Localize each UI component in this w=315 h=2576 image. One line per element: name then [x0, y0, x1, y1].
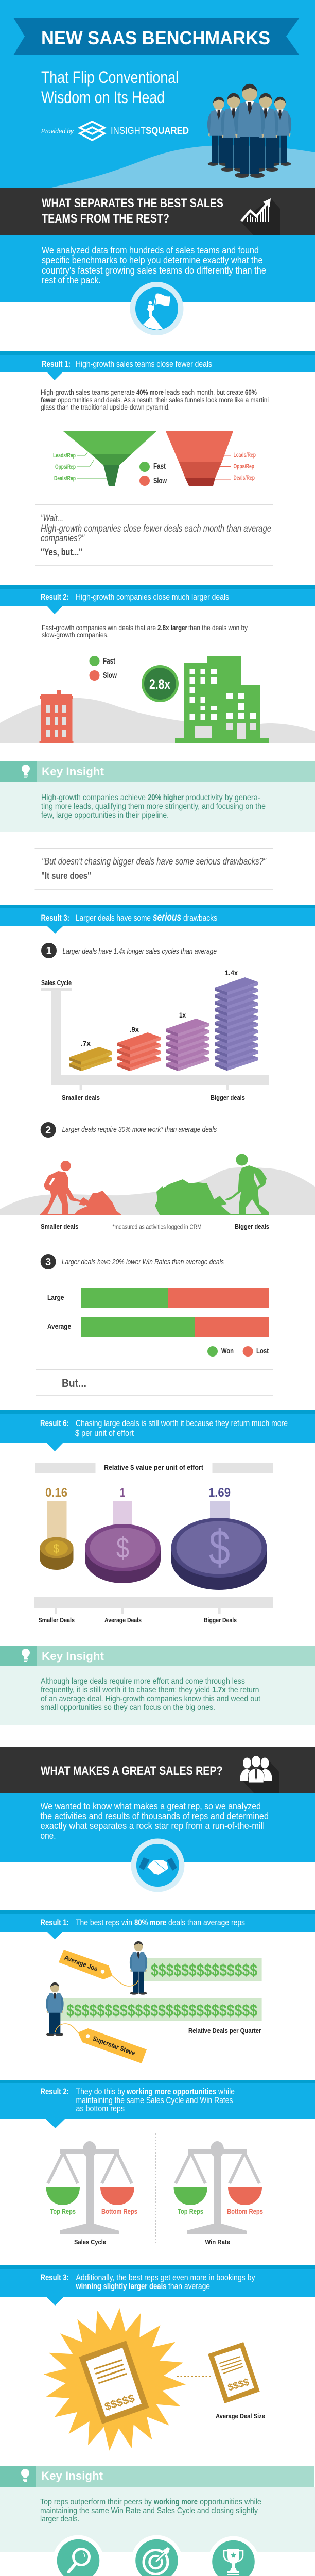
icon: magnifying glass — [52, 2535, 104, 2576]
drawback 2 heading: 2 — [45, 1125, 51, 1136]
paragraph: result 1: fewer — [41, 396, 57, 404]
deals bar: superstar steve — [60, 1998, 262, 2021]
scale: win rate: Win Rate — [205, 2238, 230, 2246]
key insight text: frequently, it is still worth it to chase them: they yield — [41, 1686, 210, 1694]
key insight text: the return — [228, 1686, 259, 1694]
key insight text: few, large opportunities in their pipeline. — [41, 811, 169, 820]
key insight text: opportunities while — [200, 2498, 261, 2506]
chart caption: Relative Deals per Quarter — [188, 2027, 261, 2035]
icon: light bulb — [21, 2469, 29, 2482]
provided by logo: Provided by — [41, 127, 74, 135]
balance scale comparison — [46, 2133, 263, 2246]
key insight text: small opportunities so they can focus on the big ones. — [41, 1703, 215, 1712]
building comparison — [0, 656, 315, 743]
legend: fast and slow — [139, 462, 167, 486]
small red building — [39, 690, 73, 743]
group of salesmen — [207, 84, 291, 178]
key insight text: productivity by genera- — [185, 793, 260, 802]
funnel chart: slow: Opps/Rep — [234, 463, 254, 470]
funnel chart: slow — [166, 431, 256, 486]
scale: win rate: Top Reps — [178, 2208, 203, 2215]
drawback 2 heading — [41, 1122, 217, 1138]
chart axis and labels: Smaller Deals — [38, 1616, 75, 1624]
drawback 3 heading — [41, 1254, 224, 1269]
worker labels: Smaller deals — [41, 1223, 78, 1230]
rep result 2 banner: maintaining the same Sales Cycle and Win Rates — [76, 2096, 233, 2105]
funnel chart: slow: Leads/Rep — [234, 451, 256, 459]
result 2 banner — [0, 585, 315, 614]
key insight heading: Key Insight — [41, 2469, 103, 2482]
chart header: Relative $ value per unit of effort — [104, 1463, 203, 1471]
chart axis and labels: Bigger Deals — [204, 1616, 237, 1624]
subtitle: That Flip Conventional — [41, 68, 179, 87]
stack: 1.4x: 1.4x — [225, 969, 238, 977]
stack: 1.4x — [215, 969, 258, 1071]
key insight heading: Key Insight — [42, 1650, 104, 1663]
result 2 banner: Result 2: — [41, 592, 69, 602]
badge: 2.8x: 2.8x — [149, 676, 170, 692]
figure: average joe — [130, 1941, 147, 1995]
key insight text: ting more leads, qualifying them more stringently, and focusing on the — [41, 802, 266, 811]
stack: .7x — [69, 1039, 112, 1071]
quote block 2: "But doesn't chasing bigger deals have some serious drawbacks?" — [42, 856, 267, 867]
subtitle — [41, 68, 179, 107]
section heading: what separates: TEAMS FROM THE REST? — [42, 212, 169, 226]
starburst with large contract: $$$$$ — [103, 2392, 136, 2413]
scale: sales cycle: Top Reps — [50, 2208, 76, 2215]
quote block 1 — [35, 504, 273, 566]
intro text: specific benchmarks to help you determine exactly what the — [42, 255, 262, 265]
icon: flag on mountain — [130, 282, 183, 335]
coin: bigger deals: 1.69 — [208, 1486, 231, 1500]
sales cycle chart: Smaller deals — [62, 1094, 100, 1101]
section heading: great sales rep — [0, 1747, 315, 1793]
large green building — [175, 656, 269, 743]
tag: superstar steve: Superstar Steve — [92, 2035, 136, 2057]
legend: won and lost — [207, 1346, 269, 1357]
stack: .9x — [117, 1025, 161, 1071]
key insight text: 20% higher — [148, 793, 184, 802]
bar: average — [47, 1317, 269, 1337]
sales cycle chart: Sales Cycle — [41, 979, 72, 987]
legend: fast and slow: Fast — [103, 657, 115, 666]
legend: fast and slow: Fast — [153, 462, 166, 471]
rep result 1 banner: deals than average reps — [168, 1918, 245, 1927]
quote block 3: But... — [62, 1377, 86, 1389]
deals bar: average joe — [144, 1958, 262, 1981]
icon: light bulb — [22, 1649, 30, 1662]
result 3 banner: Larger deals have some — [76, 913, 151, 923]
legend: won and lost: Lost — [256, 1347, 269, 1355]
rep intro text: the activities and results of thousands of reps and determined — [40, 1811, 269, 1821]
title ribbon — [13, 18, 300, 55]
green worker with large pile — [155, 1154, 269, 1215]
key insight text — [41, 1677, 261, 1712]
coin: average deals: 1 — [120, 1486, 125, 1500]
drawback 1 heading: Larger deals have 1.4x longer sales cycles than average — [63, 947, 217, 956]
scale: win rate — [174, 2141, 263, 2246]
section heading: what separates — [0, 188, 315, 235]
section heading: what separates: WHAT SEPARATES THE BEST SALES — [42, 196, 223, 210]
rep intro text: exactly what separates a rock star rep from a run-of-the-mill — [40, 1821, 265, 1831]
quote block 1: "Yes, but..." — [41, 547, 82, 558]
chart header — [35, 1463, 273, 1473]
panel: key insight 2 — [0, 1646, 315, 1725]
stack: 1x — [166, 1011, 209, 1071]
icon: trophy — [208, 2536, 259, 2576]
rep result 3 banner: than average — [168, 2282, 210, 2291]
paragraph: result 2: slow-growth companies. — [42, 631, 109, 639]
result 3 banner — [0, 905, 315, 934]
key insight text: of an average deal. High-growth companies know this and weed out — [41, 1694, 261, 1703]
title ribbon: NEW SAAS BENCHMARKS — [41, 27, 270, 48]
legend: won and lost: Won — [221, 1347, 234, 1355]
panel: rep intro — [0, 1793, 315, 1862]
key insight text: Top reps outperform their peers by — [40, 2498, 152, 2506]
panel: hero header — [0, 0, 315, 188]
legend: fast and slow: Slow — [103, 671, 117, 680]
hill — [0, 698, 315, 743]
quote block 1: companies?" — [41, 533, 85, 544]
rep intro text — [40, 1801, 269, 1841]
rep result 1 banner — [0, 1910, 315, 1939]
icon: three people — [240, 1756, 272, 1783]
stack: .9x: .9x — [130, 1025, 139, 1033]
stack: 1x: 1x — [179, 1011, 186, 1019]
legend: fast and slow — [90, 656, 117, 681]
average joe vs superstar steve chart — [46, 1941, 262, 2063]
result 6 banner — [0, 1410, 315, 1451]
win rate bar chart — [47, 1288, 269, 1357]
bar: large — [47, 1288, 269, 1308]
stack: .7x: .7x — [81, 1039, 91, 1047]
rep result 3 banner: Result 3: — [40, 2273, 69, 2282]
coin: average deals: $ — [116, 1532, 129, 1565]
result 6 banner: $ per unit of effort — [75, 1428, 134, 1438]
key insight text — [40, 2498, 261, 2523]
intro text: We analyzed data from hundreds of sales teams and found — [42, 245, 259, 256]
tag: superstar steve — [55, 2024, 147, 2063]
key insight text: High-growth companies achieve — [41, 793, 146, 802]
scale: win rate: Bottom Reps — [227, 2208, 263, 2215]
average deal size label: Average Deal Size — [216, 2412, 265, 2420]
result 3 banner: serious — [153, 911, 181, 923]
key insight text: working more — [153, 2498, 198, 2506]
rep result 1 banner: Result 1: — [40, 1918, 69, 1927]
paragraph: result 2: than the deals won by — [188, 624, 248, 632]
key insight text: larger deals. — [40, 2515, 79, 2523]
result 1 banner: High-growth sales teams close fewer deals — [76, 359, 212, 369]
provided by logo: SQUARED — [146, 126, 189, 137]
rep result 2 banner: They do this by — [76, 2087, 126, 2096]
rep result 1 banner: The best reps win — [76, 1918, 132, 1927]
quote block 2: "It sure does" — [41, 871, 91, 881]
legend: fast and slow: Slow — [153, 477, 167, 485]
icon: handshake — [131, 1838, 184, 1892]
hill — [49, 145, 315, 188]
workers illustration — [0, 1154, 315, 1230]
panel: key insight 3 — [0, 2466, 315, 2552]
coin chart — [34, 1463, 273, 1624]
paragraph: result 2 — [42, 624, 248, 639]
intro text: country's fastest growing sales teams do differently than the — [42, 265, 266, 276]
rep intro text: We wanted to know what makes a great rep, so we analyzed — [40, 1801, 261, 1811]
scale: sales cycle — [46, 2141, 137, 2246]
drawback 2 heading: Larger deals require 30% more work* than average deals — [62, 1126, 217, 1134]
red worker with small pile — [40, 1161, 121, 1215]
paragraph: result 1: leads each month, but create — [165, 388, 243, 396]
result 3 banner: drawbacks — [183, 913, 217, 923]
result 3 banner: Result 3: — [41, 913, 69, 923]
starburst with large contract — [44, 2308, 186, 2451]
average contract: $$$$ — [226, 2377, 251, 2394]
icon: target — [131, 2535, 182, 2576]
section heading: great sales rep: WHAT MAKES A GREAT SALES REP? — [41, 1764, 222, 1778]
panel: intro — [0, 235, 315, 302]
rep result 3 banner: Additionally, the best reps get even more in bookings by — [76, 2273, 255, 2282]
coin: average deals — [85, 1486, 161, 1583]
paragraph: result 1 — [41, 388, 269, 411]
result 1 banner — [0, 351, 315, 380]
rep result 1 banner: 80% more — [134, 1918, 166, 1927]
worker labels — [41, 1223, 269, 1230]
paragraph: result 1: High-growth sales teams generate — [41, 388, 135, 396]
result 6 banner: Result 6: — [40, 1418, 69, 1428]
coin: bigger deals: $ — [209, 1520, 230, 1575]
deals bar: average joe: $$$$$$$$$$$$$$ — [151, 1961, 257, 1979]
chart axis and labels — [34, 1597, 273, 1624]
sales cycle chart — [41, 969, 269, 1101]
sales cycle chart: Bigger deals — [211, 1094, 245, 1101]
tag: average joe — [59, 1950, 138, 1986]
average contract — [208, 2342, 260, 2403]
result 2 banner: High-growth companies close much larger deals — [76, 592, 229, 602]
funnel chart: fast: Opps/Rep — [55, 463, 76, 470]
drawback 1 heading: 1 — [46, 945, 52, 957]
coin: smaller deals: 0.16 — [45, 1486, 67, 1500]
scale: sales cycle: Sales Cycle — [74, 2238, 106, 2246]
key insight text: 1.7x — [212, 1686, 226, 1694]
coin: smaller deals — [40, 1486, 73, 1570]
icon: growth chart — [241, 198, 271, 222]
rep intro text: one. — [40, 1831, 56, 1841]
funnel chart: fast: Deals/Rep — [54, 474, 76, 482]
intro text — [42, 245, 266, 285]
panel: key insight 1 — [0, 761, 315, 832]
icon: light bulb — [22, 765, 30, 778]
rep result 2 banner: working more opportunities — [126, 2087, 216, 2096]
funnel chart: slow: Deals/Rep — [234, 474, 255, 481]
scale: sales cycle: Bottom Reps — [101, 2208, 137, 2215]
quote block 2 — [35, 848, 273, 889]
bar: average: Average — [47, 1322, 71, 1330]
drawback 1 heading — [41, 943, 217, 958]
chart axis and labels: Average Deals — [104, 1616, 142, 1624]
quote block 1: "Wait... — [41, 513, 63, 524]
provided by logo: INSIGHT — [111, 126, 146, 137]
rep result 2 banner — [0, 2080, 315, 2128]
paragraph: result 1: 40% more — [136, 388, 164, 396]
tag: average joe: Average Joe — [63, 1954, 99, 1973]
intro text: rest of the pack. — [42, 275, 101, 285]
bar: large: Large — [47, 1293, 64, 1301]
rep result 2 banner: while — [218, 2087, 235, 2096]
rep result 3 banner — [0, 2265, 315, 2306]
key insight text — [41, 793, 266, 820]
subtitle: Wisdom on Its Head — [41, 88, 165, 107]
paragraph: result 1: 60% — [245, 388, 257, 396]
drawback 3 heading: Larger deals have 20% lower Win Rates than average deals — [62, 1258, 224, 1266]
drawback 3 heading: 3 — [45, 1257, 51, 1268]
funnel chart: fast — [53, 431, 156, 486]
deal size illustration — [44, 2308, 265, 2451]
badge: 2.8x — [142, 665, 179, 702]
rep result 2 banner: Result 2: — [40, 2087, 69, 2096]
key insight text: Although large deals require more effort and come through less — [41, 1677, 245, 1686]
result 1 banner: Result 1: — [42, 359, 71, 369]
coin: bigger deals — [171, 1486, 267, 1590]
key insight text: maintaining the same Win Rate and Sales Cycle and closing slightly — [40, 2506, 258, 2515]
paragraph: result 1: glass than the traditional upside-down pyramid. — [41, 403, 170, 411]
figure: superstar steve — [46, 1982, 64, 2036]
coin: smaller deals: $ — [54, 1542, 59, 1556]
paragraph: result 2: Fast-growth companies win deals that are — [42, 624, 156, 632]
rep result 3 banner: winning slightly larger deals — [76, 2282, 167, 2291]
paragraph: result 2: 2.8x larger — [157, 624, 188, 632]
key insight heading: Key Insight — [42, 765, 104, 778]
paragraph: result 1: opportunities and deals. As a result, their sales funnels look more like a martini — [58, 396, 269, 404]
worker labels: *measured as activities logged in CRM — [113, 1223, 202, 1230]
provided by logo — [41, 122, 189, 140]
deals bar: superstar steve: $$$$$$$$$$$$$$$$$$$$$$$$$ — [66, 2001, 257, 2020]
worker labels: Bigger deals — [235, 1223, 269, 1230]
funnel chart: fast: Leads/Rep — [53, 452, 76, 459]
rep result 2 banner: as bottom reps — [76, 2104, 125, 2113]
